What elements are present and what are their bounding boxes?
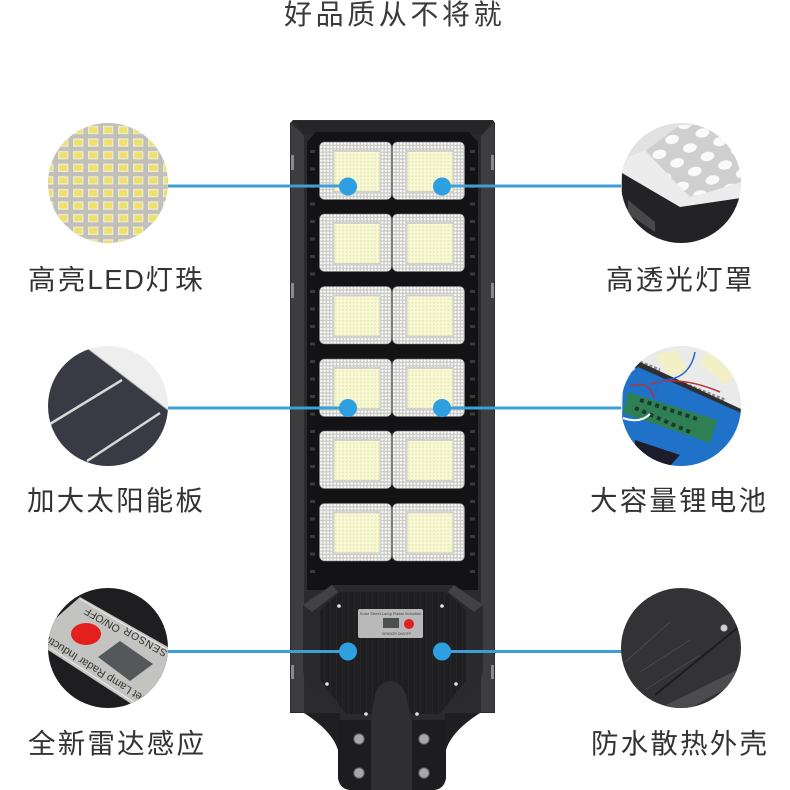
bracket bolts [354,734,429,778]
lamp inner panel [307,132,478,590]
icon: radar sensor detail: SENSOR [121,624,170,659]
sensor label plate [358,609,423,638]
lamp side clips [291,155,494,679]
label: new radar sensing: 全新雷达感应 [28,728,206,759]
lamp module row 5 right [392,431,464,488]
bracket lower body [338,720,446,790]
red switch [404,619,414,629]
connector bottom left [168,642,357,660]
lamp module row 2 left [320,214,392,272]
label: LED beads: 高亮LED灯珠 [28,264,205,295]
label: enlarged solar panel: 加大太阳能板 [27,485,205,516]
control housing [303,585,483,722]
connector top left [168,178,357,196]
sensor captions: SENSOR ON/OFF [382,632,411,636]
lamp module row 2 right [392,214,464,272]
lamp outer body [290,120,495,713]
lamp module row 3 right [392,286,464,344]
housing shoulders [303,585,483,612]
lamp module row 1 right [392,142,464,200]
lamp module row 5 left [320,431,392,488]
icon: radar sensor detail: ON/OFF [82,605,122,635]
label: large-capacity lithium battery: 大容量锂电池 [590,485,768,516]
sensor window [383,618,399,628]
lamp inner rib teeth [312,150,472,585]
connector bottom right [433,642,622,660]
sensor label text: Solar Street Lamp Radar Induction [360,611,421,616]
housing screws [325,604,458,716]
lamp top frame [293,121,492,134]
solar street lamp [290,120,495,790]
icon: radar sensor detail: eet Lamp Radar Inductio [41,632,150,706]
label: waterproof heat-dissipating shell: 防水散热外壳 [591,728,769,759]
connector top right [433,178,622,196]
lamp arm [371,681,412,790]
lamp module row 4 right [392,359,464,416]
lamp module row 6 right [392,504,464,561]
icon: lithium battery detail [621,346,741,466]
icon: waterproof shell detail [621,588,741,708]
lamp side rails [291,123,494,712]
lamp module row 1 left [320,142,392,200]
connector middle right [433,399,622,417]
lamp bracket [304,713,480,790]
connector middle left [168,399,357,417]
icon: translucent lens detail [621,123,741,243]
label: translucent lampshade: 高透光灯罩 [606,264,754,295]
lamp module row 4 left [320,359,392,416]
icon: radar sensor detail [41,588,170,708]
housing centre plate [320,592,466,714]
icon: solar panel detail [48,346,168,466]
lamp module row 6 left [320,504,392,561]
icon: LED beads detail [48,123,168,243]
lamp module row 3 left [320,286,392,344]
